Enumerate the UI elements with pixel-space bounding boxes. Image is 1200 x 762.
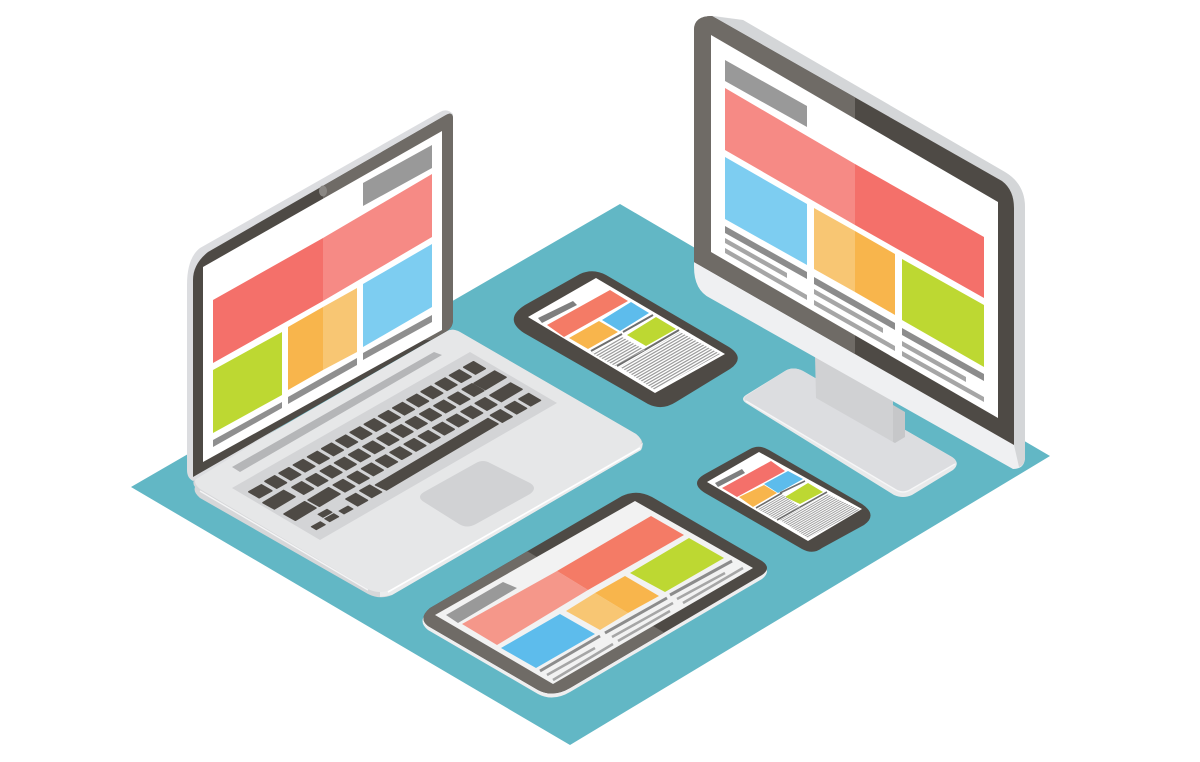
text lines under blue [725,226,807,300]
phone screen [707,452,862,541]
text lines under green [902,328,984,402]
monitor [690,10,1025,469]
orange block [288,288,357,390]
laptop lid [187,100,463,481]
stand base [743,368,957,497]
stand neck [815,355,905,443]
red banner [725,88,984,298]
body text [592,332,720,390]
top rim [712,16,1025,467]
monitor stand [743,355,957,497]
phone small [697,447,871,552]
green block [627,317,676,346]
monitor bezel [690,10,1014,445]
orange block [569,321,618,349]
green block [902,259,984,367]
orange block [566,576,659,630]
heading lines [591,315,679,366]
blue block [501,614,595,668]
heading lines [756,481,827,520]
phone screen [528,278,725,393]
trackpad [420,461,534,526]
isometric responsive devices illustration [131,16,1050,745]
tablet [422,492,767,698]
text lines [213,315,432,447]
webcam [319,186,327,196]
header block [538,301,577,323]
laptop base [193,330,643,597]
phone body [697,447,871,552]
phone large [514,271,738,407]
keyboard [232,352,557,540]
red banner [547,290,628,337]
header block [725,60,807,127]
monitor shell [694,16,1025,469]
laptop [187,100,643,597]
tablet edge [422,496,767,698]
red banner [722,461,785,497]
header block [363,145,432,206]
monitor screen [711,35,998,418]
blue block [363,244,432,347]
text lines [540,561,743,680]
blue block [725,157,807,265]
green block [213,332,282,433]
body text [758,494,860,538]
tablet screen [435,501,753,684]
header block [715,469,745,487]
orange block [814,208,895,315]
red banner [213,174,432,363]
text lines under orange [814,277,895,351]
tablet bezel [423,492,767,694]
blue block [602,302,649,331]
green block [785,483,823,504]
laptop screen [203,131,442,462]
teal floor [131,204,1050,745]
green block [630,538,724,592]
phone body [514,271,738,407]
orange block [739,485,777,507]
blue block [764,471,803,493]
header block [446,582,517,623]
red banner [462,516,684,645]
